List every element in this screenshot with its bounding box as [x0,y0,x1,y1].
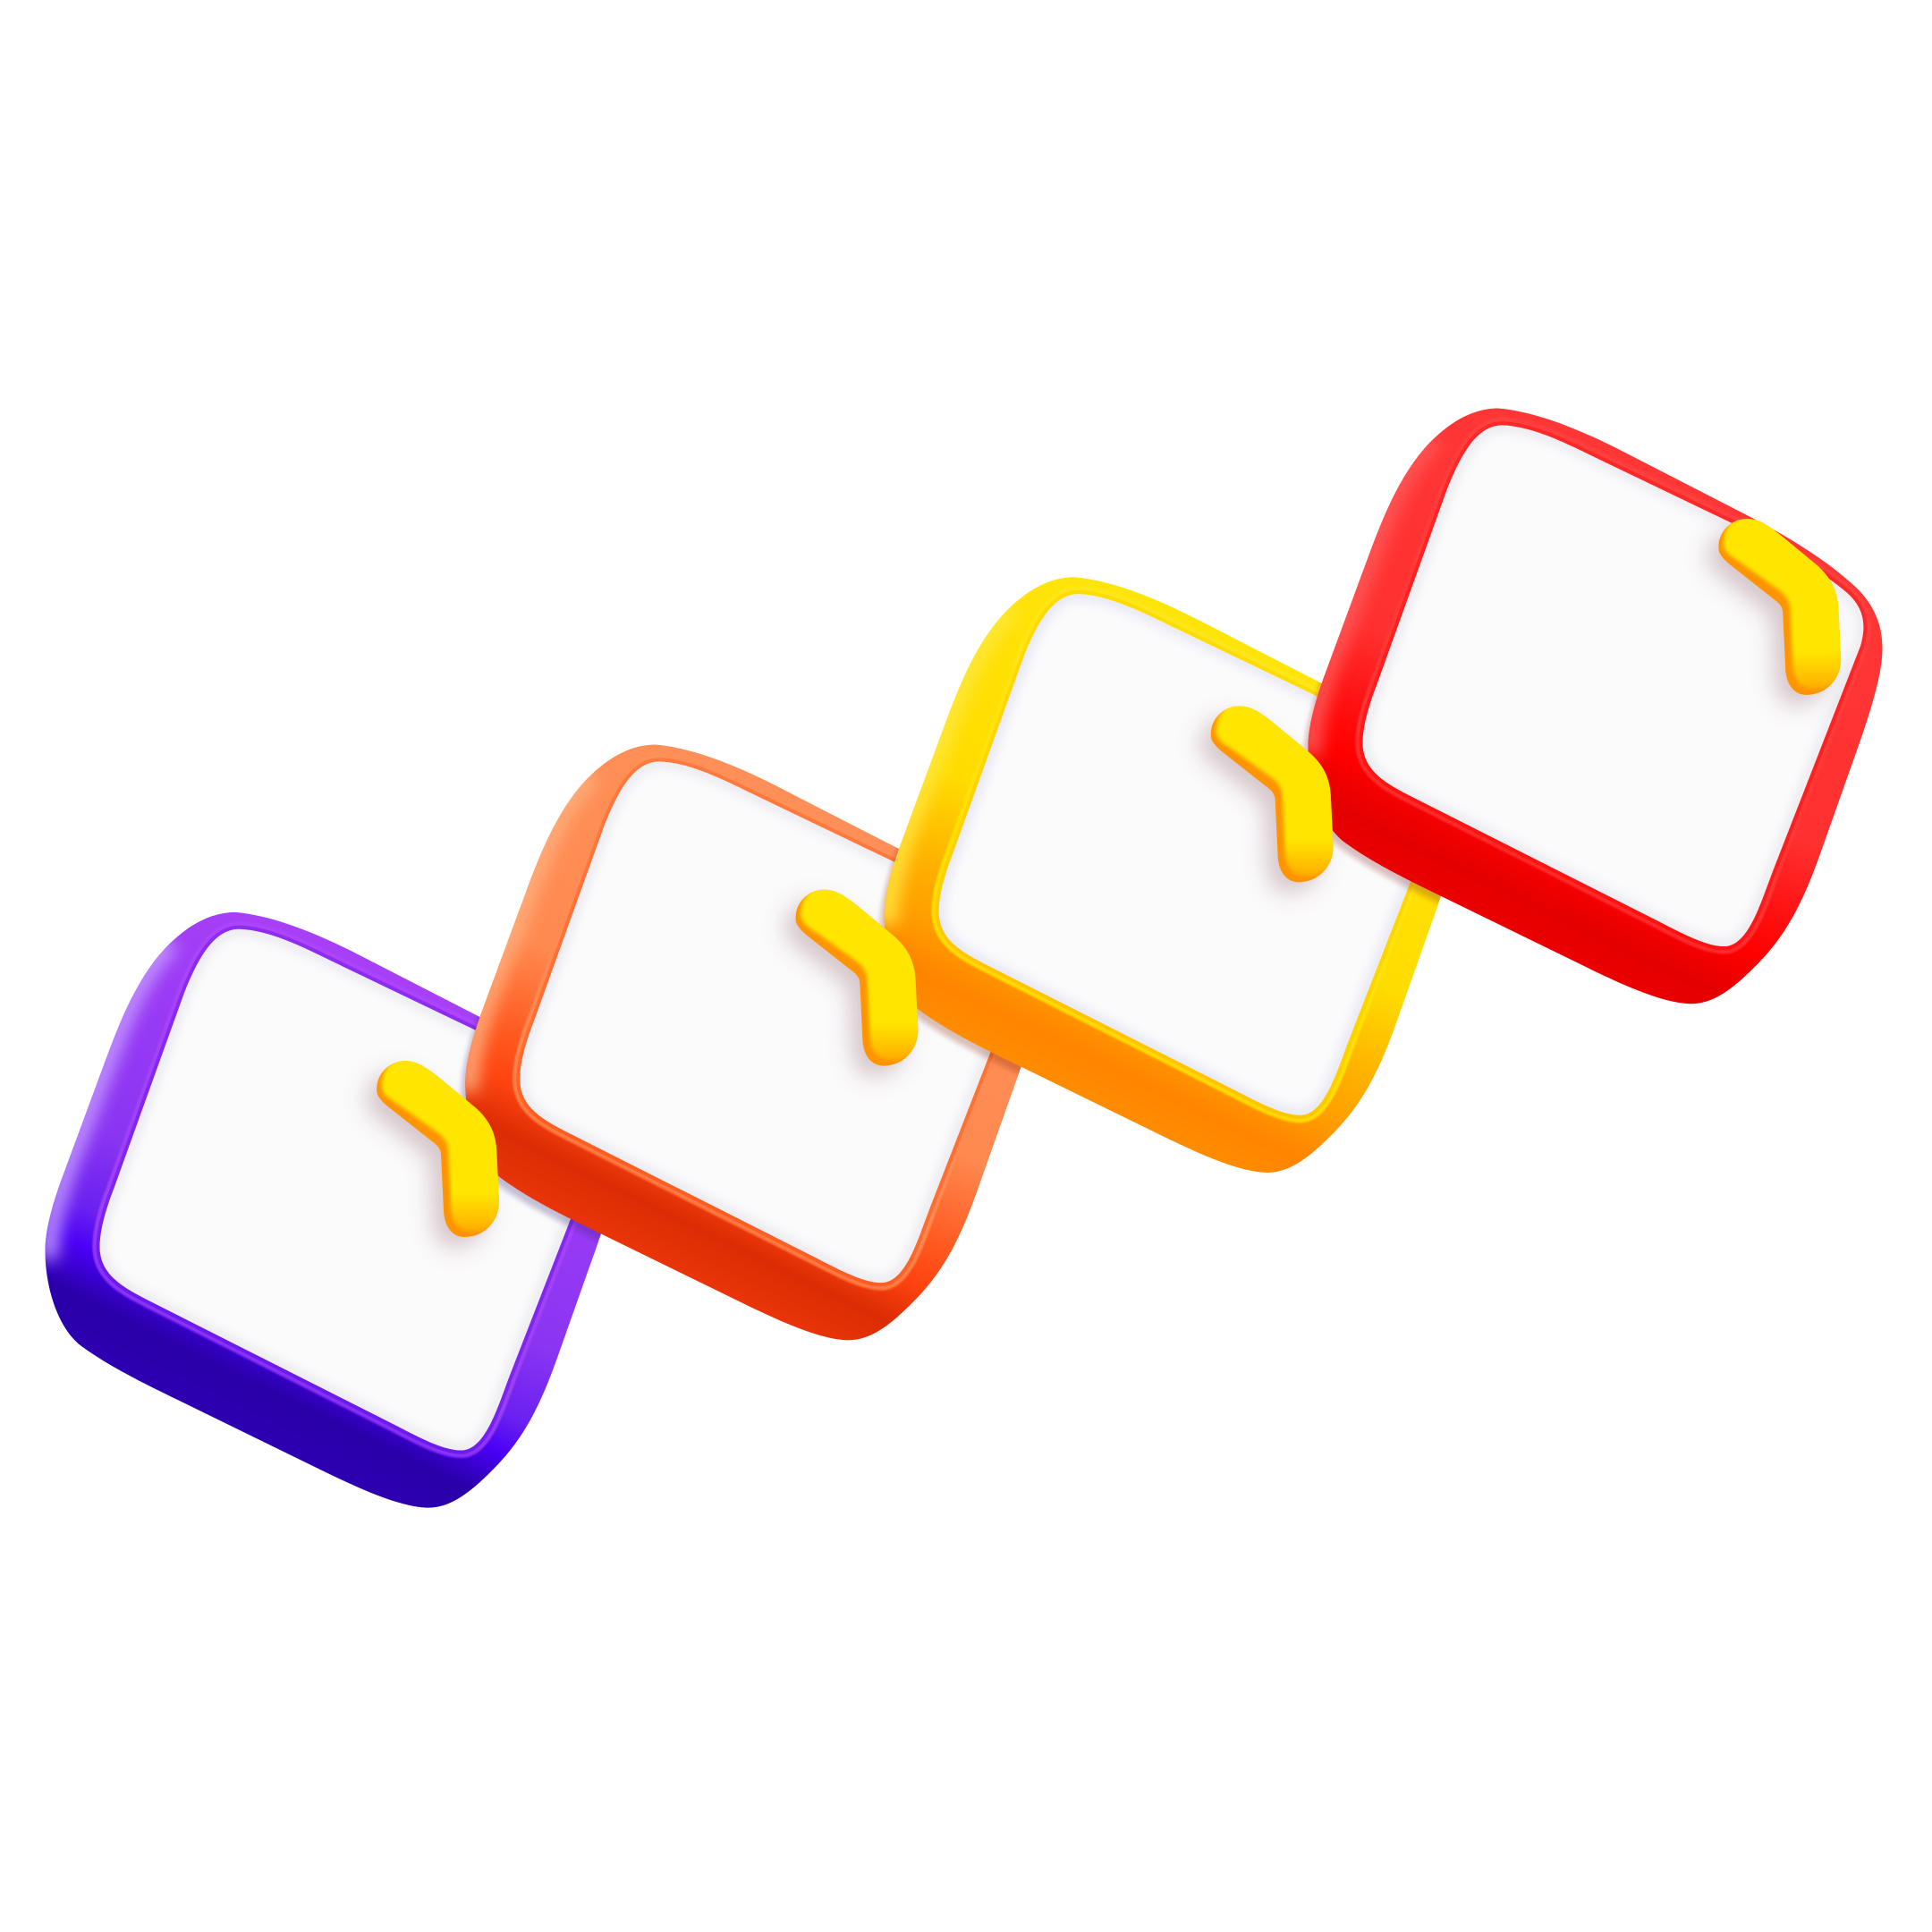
orange panel [520,761,1021,1283]
purple body [46,912,620,1508]
red panel edge shading [1363,425,1863,946]
orange panel edge shading [520,761,1021,1283]
purple lip [100,929,600,1450]
shadow: red card on yellow card [1302,682,1441,905]
chevron top [1216,701,1339,877]
chevron shadow [1707,530,1830,706]
yellow panel edge shading [939,594,1440,1115]
orange body [465,745,1039,1340]
chevron side [1718,519,1841,695]
card: red step [1308,408,1883,1004]
purple panel [100,929,600,1450]
icon: chevron on purple card [366,1056,505,1248]
chevron shadow [1199,717,1322,894]
red left highlight [1311,439,1435,756]
infographic: four linked cards [45,408,1882,1508]
shadow: yellow card on orange card [878,848,1021,1075]
red lip [1363,425,1863,946]
card: purple step [46,912,620,1508]
orange left highlight [469,775,592,1092]
purple left highlight [48,943,172,1259]
red panel [1363,425,1863,946]
yellow lip groove [939,594,1440,1115]
icon: chevron on orange card [784,885,924,1077]
red lip groove [1363,425,1863,946]
chevron side [796,890,918,1066]
chevron side [377,1061,499,1237]
card: yellow step [885,577,1459,1173]
card: orange step [465,745,1039,1340]
chevron top [801,885,924,1060]
shadow: orange card on purple card [459,1016,601,1242]
yellow left highlight [887,608,1011,925]
chevron top [1724,513,1847,690]
chevron side [1211,706,1334,882]
orange lip groove [520,761,1021,1283]
yellow panel [939,594,1440,1115]
chevron top [382,1056,505,1232]
red body [1308,408,1883,1004]
chevron shadow [784,901,907,1077]
orange lip [520,761,1021,1283]
chevron shadow [366,1072,488,1248]
purple lip groove [100,929,600,1450]
yellow lip [939,594,1440,1115]
icon: chevron on yellow card [1199,701,1339,894]
icon: chevron on red card [1707,513,1847,706]
yellow body [885,577,1459,1173]
purple panel edge shading [100,929,600,1450]
